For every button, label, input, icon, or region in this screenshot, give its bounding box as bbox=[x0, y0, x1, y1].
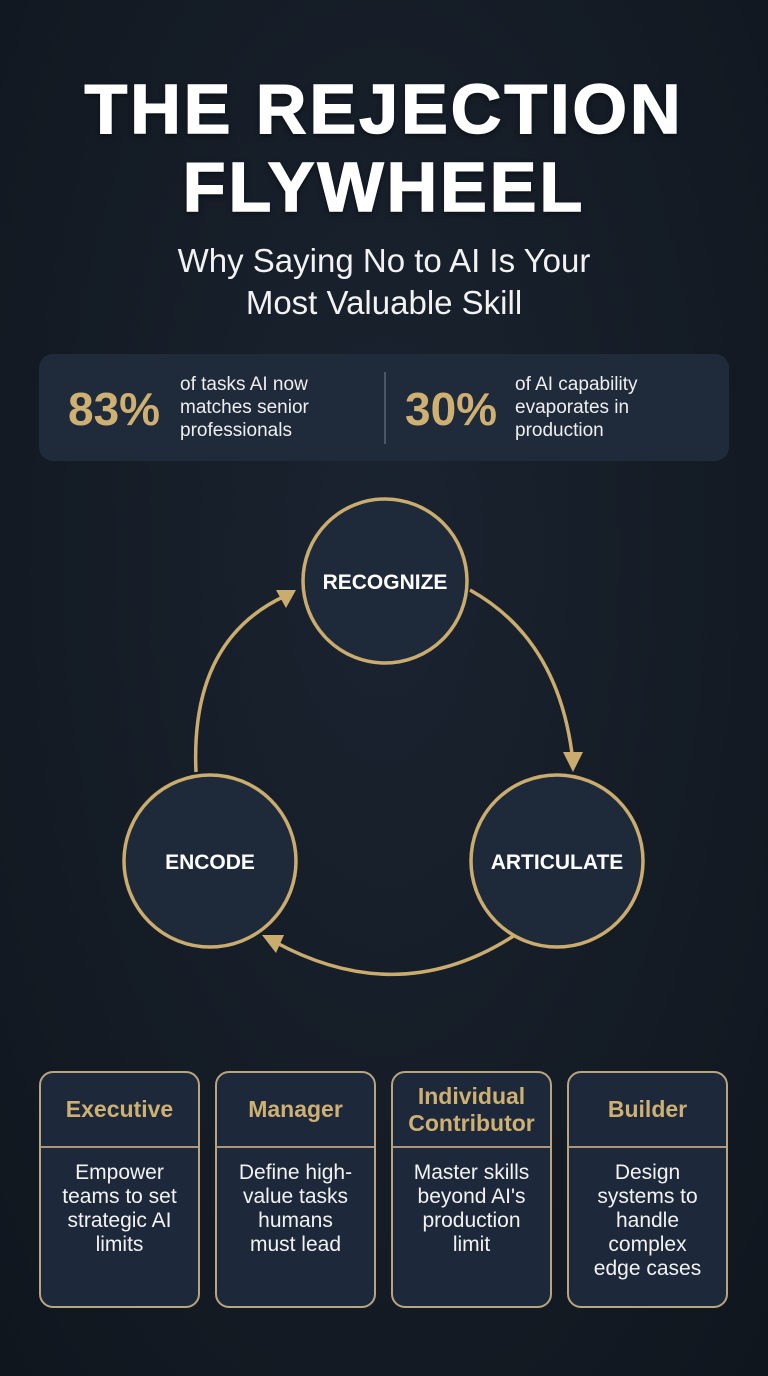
stat text 1 bbox=[180, 374, 309, 441]
card: builder: Design bbox=[615, 1161, 680, 1184]
card: individual contributor: beyond AI's bbox=[418, 1185, 525, 1208]
node: recognize bbox=[303, 499, 467, 663]
arrow: recognize to articulate bbox=[470, 590, 583, 772]
node: articulate bbox=[471, 775, 643, 947]
card: executive: Empower bbox=[75, 1161, 164, 1184]
stat text 2: of AI capability bbox=[515, 374, 638, 395]
subtitle: Most Valuable Skill bbox=[246, 284, 522, 321]
card: individual contributor bbox=[391, 1071, 552, 1308]
title: FLYWHEEL bbox=[183, 148, 585, 226]
subtitle: Why Saying No to AI Is Your bbox=[178, 242, 590, 279]
card: executive: teams to set bbox=[62, 1185, 177, 1208]
card: individual contributor: Contributor bbox=[408, 1110, 535, 1136]
stat text 1: matches senior bbox=[180, 397, 309, 418]
card: manager: humans bbox=[258, 1209, 333, 1232]
stat text 2: production bbox=[515, 420, 604, 441]
card: builder: Builder bbox=[608, 1096, 687, 1122]
card: executive: strategic AI bbox=[68, 1209, 171, 1232]
card: builder: complex bbox=[608, 1233, 687, 1256]
title: THE REJECTION bbox=[84, 70, 684, 148]
card: manager: value tasks bbox=[243, 1185, 348, 1208]
stat text 2 bbox=[515, 374, 638, 441]
flywheel diagram bbox=[122, 497, 645, 976]
stat: 30%: 30% bbox=[405, 383, 497, 435]
node: encode bbox=[124, 775, 296, 947]
card: individual contributor: Individual bbox=[418, 1082, 525, 1108]
card: individual contributor: production bbox=[422, 1209, 521, 1232]
card: builder: handle bbox=[616, 1209, 679, 1232]
subtitle bbox=[178, 242, 590, 321]
node: recognize: RECOGNIZE bbox=[323, 571, 447, 594]
stat text 2: evaporates in bbox=[515, 397, 629, 418]
card: manager bbox=[215, 1071, 376, 1308]
arrow: articulate to encode bbox=[262, 935, 515, 974]
card: individual contributor: Master skills bbox=[414, 1161, 529, 1184]
node: articulate: ARTICULATE bbox=[491, 851, 623, 874]
stat text 1: professionals bbox=[180, 420, 292, 441]
node: encode: ENCODE bbox=[165, 851, 255, 874]
card: manager: Manager bbox=[248, 1096, 343, 1122]
panel: stats bbox=[39, 354, 729, 461]
card: manager: must lead bbox=[250, 1233, 341, 1256]
card: builder: edge cases bbox=[594, 1257, 701, 1280]
title bbox=[84, 70, 684, 226]
card: builder: systems to bbox=[597, 1185, 698, 1208]
stat text 1: of tasks AI now bbox=[180, 374, 308, 395]
card: executive: Executive bbox=[66, 1096, 173, 1122]
card: manager: Define high- bbox=[239, 1161, 352, 1184]
card: executive: limits bbox=[96, 1233, 143, 1256]
card: executive bbox=[39, 1071, 200, 1308]
arrow: encode to recognize bbox=[196, 590, 296, 772]
stat: 83%: 83% bbox=[68, 383, 160, 435]
card: builder bbox=[567, 1071, 728, 1308]
card: individual contributor: limit bbox=[453, 1233, 490, 1256]
